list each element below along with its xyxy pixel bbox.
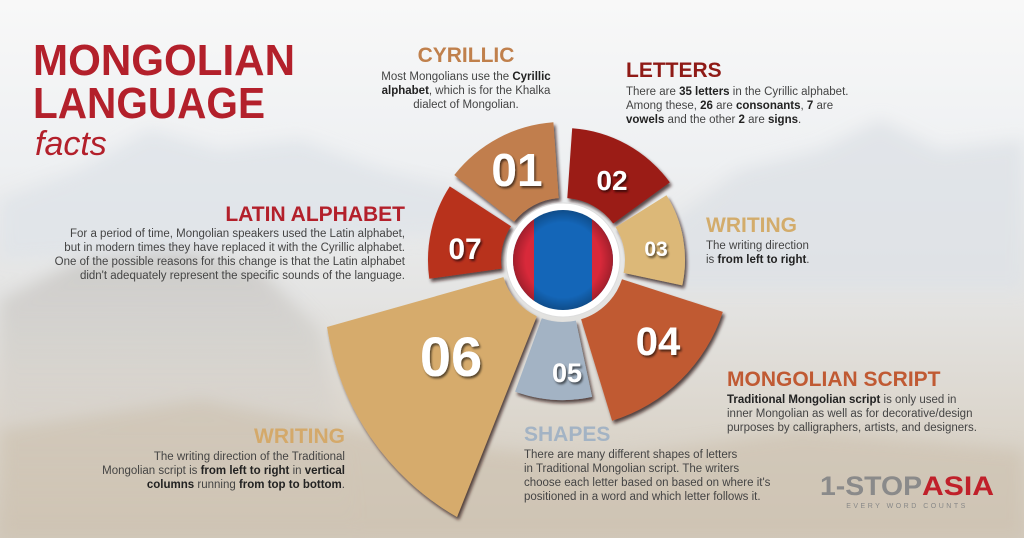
- text: writing 06: Mongolian script is from left to right in vertical: [102, 465, 345, 477]
- text: latin alphabet: One of the possible reasons for this change is that the Latin alphabet: [55, 256, 406, 268]
- logo: 1-STOP: [820, 471, 922, 501]
- text: mongolian script: [727, 368, 977, 434]
- text: writing 03: WRITING: [706, 214, 797, 237]
- title: LANGUAGE: [33, 79, 265, 128]
- text: shapes: [524, 423, 771, 503]
- text: cyrillic: dialect of Mongolian.: [413, 99, 519, 111]
- segment 02: 02: [596, 165, 628, 196]
- segment 06: 06: [420, 325, 482, 388]
- segment 06: [327, 277, 537, 517]
- text: writing 03: The writing direction: [706, 240, 809, 252]
- text: letters: LETTERS: [626, 59, 722, 82]
- text: latin alphabet: LATIN ALPHABET: [225, 203, 405, 226]
- logo: [820, 471, 994, 510]
- logo: EVERY WORD COUNTS: [846, 503, 968, 510]
- text: shapes: choose each letter based on based on where it's: [524, 477, 771, 489]
- text: cyrillic: Most Mongolians use the Cyrillic: [381, 71, 551, 83]
- segment 05: 05: [552, 358, 582, 388]
- logo: ASIA: [922, 471, 994, 501]
- segment 01: [454, 122, 559, 222]
- text: cyrillic: [381, 44, 551, 111]
- segment 04: [581, 279, 723, 421]
- text: writing 03: [706, 214, 810, 266]
- segment 03: 03: [644, 238, 668, 261]
- text: letters: Among these, 26 are consonants, 7 are: [626, 100, 833, 112]
- text: mongolian script: Traditional Mongolian script is only used in: [727, 394, 956, 406]
- text: cyrillic: alphabet, which is for the Khalka: [382, 85, 551, 97]
- segment 07: 07: [448, 233, 482, 266]
- segment 04: 04: [636, 320, 681, 364]
- text: mongolian script: purposes by calligraphers, artists, and designers.: [727, 422, 977, 434]
- text: writing 06: [102, 425, 345, 491]
- segment 02: [567, 128, 670, 224]
- text: letters: vowels and the other 2 are signs.: [626, 114, 801, 126]
- text: shapes: positioned in a word and which letter follows it.: [524, 491, 761, 503]
- segment 05: [515, 318, 592, 400]
- text: latin alphabet: [55, 203, 406, 282]
- wheel: [327, 122, 723, 517]
- text: shapes: in Traditional Mongolian script. The writers: [524, 463, 739, 475]
- segment 07: [428, 186, 511, 279]
- text: letters: There are 35 letters in the Cyrillic alphabet.: [626, 86, 848, 98]
- text: writing 06: The writing direction of the Traditional: [154, 451, 345, 463]
- text: latin alphabet: but in modern times they have replaced it with the Cyrillic alphabet.: [64, 242, 405, 254]
- text: shapes: SHAPES: [524, 423, 610, 446]
- text: writing 06: WRITING: [254, 425, 345, 448]
- text: letters: [626, 59, 848, 126]
- title: [33, 36, 295, 163]
- segment 01: 01: [491, 144, 543, 196]
- text: mongolian script: inner Mongolian as well as for decorative/design: [727, 408, 972, 420]
- text: writing 03: is from left to right.: [706, 254, 810, 266]
- text: latin alphabet: For a period of time, Mongolian speakers used the Latin alphabet,: [70, 228, 405, 240]
- segment 03: [616, 195, 685, 285]
- text: shapes: There are many different shapes of letters: [524, 449, 738, 461]
- text: writing 06: columns running from top to bottom.: [147, 479, 345, 491]
- title: facts: [35, 125, 107, 163]
- text: cyrillic: CYRILLIC: [418, 44, 514, 67]
- flag: [506, 203, 620, 317]
- title: MONGOLIAN: [33, 36, 295, 85]
- text: latin alphabet: didn't adequately represent the specific sounds of the language.: [80, 270, 405, 282]
- text: mongolian script: MONGOLIAN SCRIPT: [727, 368, 941, 391]
